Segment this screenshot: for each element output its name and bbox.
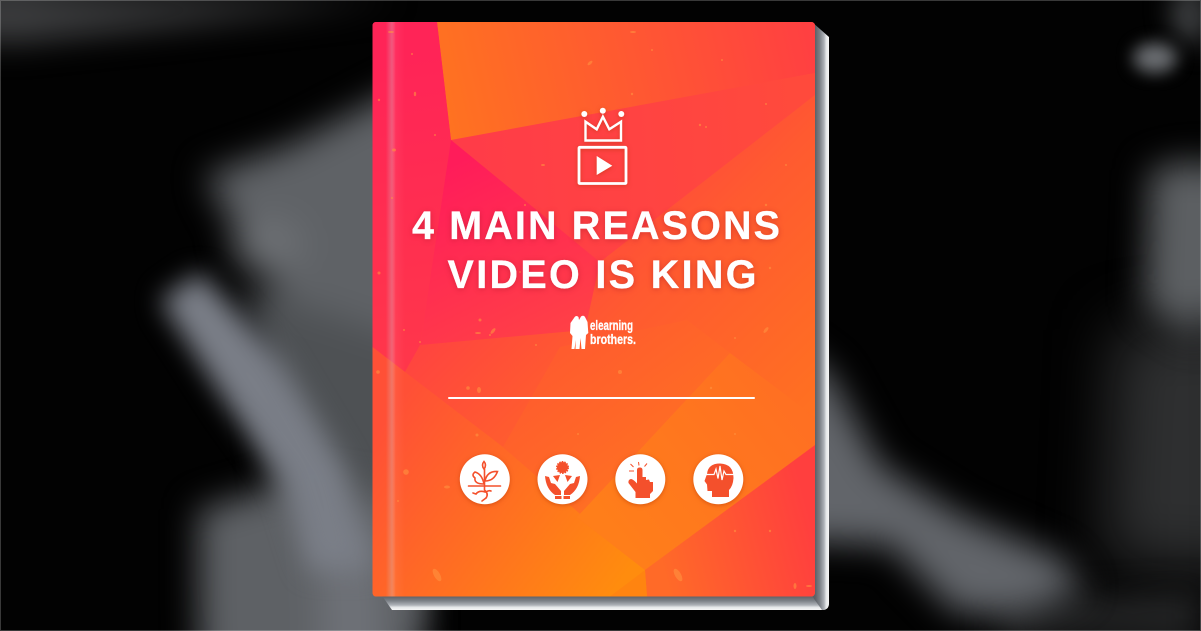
icon: crown over video player xyxy=(579,108,626,184)
icon: hand pointer tapping xyxy=(615,454,665,504)
icon: crown xyxy=(581,108,624,140)
icon: hands holding flower xyxy=(538,454,588,504)
logo: eLearning Brothers: elearning xyxy=(590,317,633,333)
title: VIDEO IS KING xyxy=(448,253,756,297)
logo: eLearning Brothers: brothers. xyxy=(590,331,636,347)
icon: video player xyxy=(579,147,626,184)
book cover xyxy=(372,22,815,596)
icon: head with brainwave xyxy=(693,454,743,504)
spine highlight xyxy=(372,22,406,596)
title: 4 MAIN REASONS xyxy=(412,204,780,248)
title xyxy=(412,204,780,297)
book xyxy=(372,22,829,610)
logo figures xyxy=(570,316,588,349)
paint speckles xyxy=(376,31,812,589)
logo: eLearning Brothers xyxy=(570,316,636,349)
icon: growing plant xyxy=(460,454,510,504)
divider line xyxy=(448,397,755,399)
book page block xyxy=(378,22,829,610)
